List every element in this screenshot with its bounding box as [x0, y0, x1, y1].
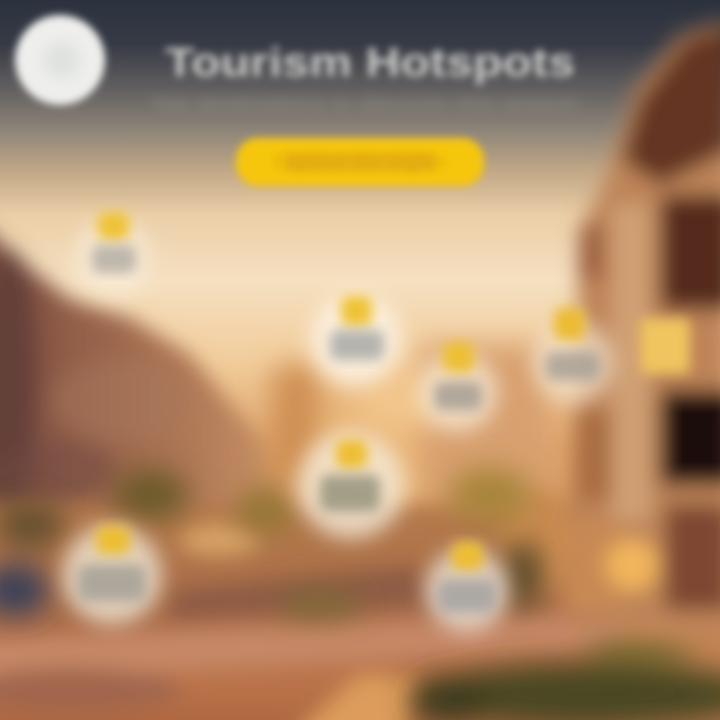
hotspot marker 7 [425, 542, 509, 632]
hotspot marker 3 [418, 342, 498, 432]
mountain on the left [0, 215, 275, 540]
vegetation [0, 467, 720, 720]
subtitle: Top destinations to discover this season [150, 95, 580, 112]
hotspot marker 5 [297, 431, 405, 539]
hotspot marker 2 [310, 294, 402, 386]
hotspot marker 4 [531, 308, 615, 404]
building on the right [560, 20, 720, 640]
lit window [640, 318, 690, 374]
yellow banner: Explore the sights [273, 151, 447, 173]
hotspot marker 1 [75, 212, 151, 296]
ground and road [0, 490, 620, 720]
hotspot marker 6 [62, 525, 162, 625]
logo badge [15, 15, 105, 105]
distant town [272, 345, 550, 510]
title: Tourism Hotspots [165, 39, 575, 85]
yellow banner [236, 138, 484, 186]
